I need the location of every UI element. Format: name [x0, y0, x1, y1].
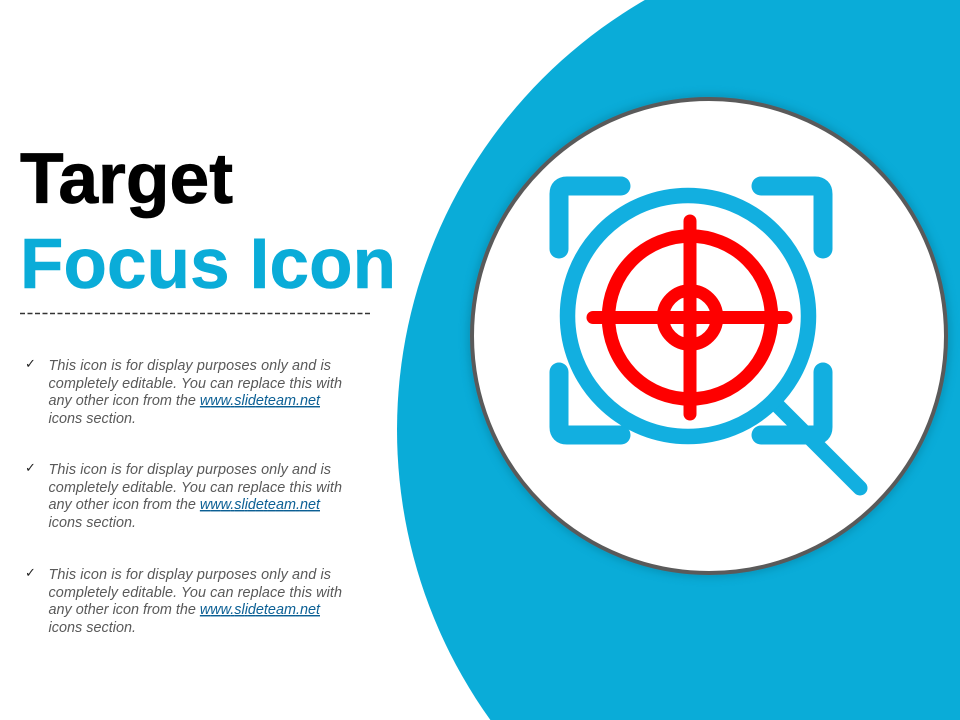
text block: bullet 2	[25, 461, 342, 531]
large blue background circle	[397, 0, 960, 720]
text block: bullet 3	[25, 566, 342, 636]
text block: bullet 1	[25, 357, 342, 427]
text block: bullet 3: completely editable. You can replace this with	[48, 585, 342, 601]
title: Target: Target	[20, 140, 233, 219]
icon: magnifier ring	[568, 196, 808, 436]
text block: bullet 1: completely editable. You can replace this with	[48, 376, 342, 392]
text block: bullet 3: any other icon from the www.slideteam.net	[48, 602, 321, 618]
text block: bullet 3: icons section.	[48, 620, 136, 636]
title: Focus Icon: Focus Icon	[20, 225, 396, 304]
icon: magnifier handle	[774, 402, 860, 488]
text block: bullet 2: any other icon from the www.slideteam.net	[48, 497, 321, 513]
icon: red crosshair	[593, 221, 786, 414]
text block: bullet 1: This icon is for display purposes only and is	[48, 358, 331, 374]
text block: bullet 3: This icon is for display purposes only and is	[48, 567, 331, 583]
text block: bullet 1: any other icon from the www.slideteam.net	[48, 393, 321, 409]
text block: bullet 2: ✓	[25, 461, 36, 476]
text block: bullet 2: This icon is for display purposes only and is	[48, 462, 331, 478]
icon: target focus	[559, 186, 860, 488]
white circle panel with grey outline	[469, 96, 949, 576]
text block: bullet 3: ✓	[25, 566, 36, 581]
dashed divider	[20, 312, 371, 314]
icon: corner brackets	[559, 186, 823, 435]
text block: bullet 2: icons section.	[48, 515, 136, 531]
text block: bullet 1: ✓	[25, 357, 36, 372]
text block: bullet 1: icons section.	[48, 411, 136, 427]
text block: bullet 2: completely editable. You can replace this with	[48, 480, 342, 496]
